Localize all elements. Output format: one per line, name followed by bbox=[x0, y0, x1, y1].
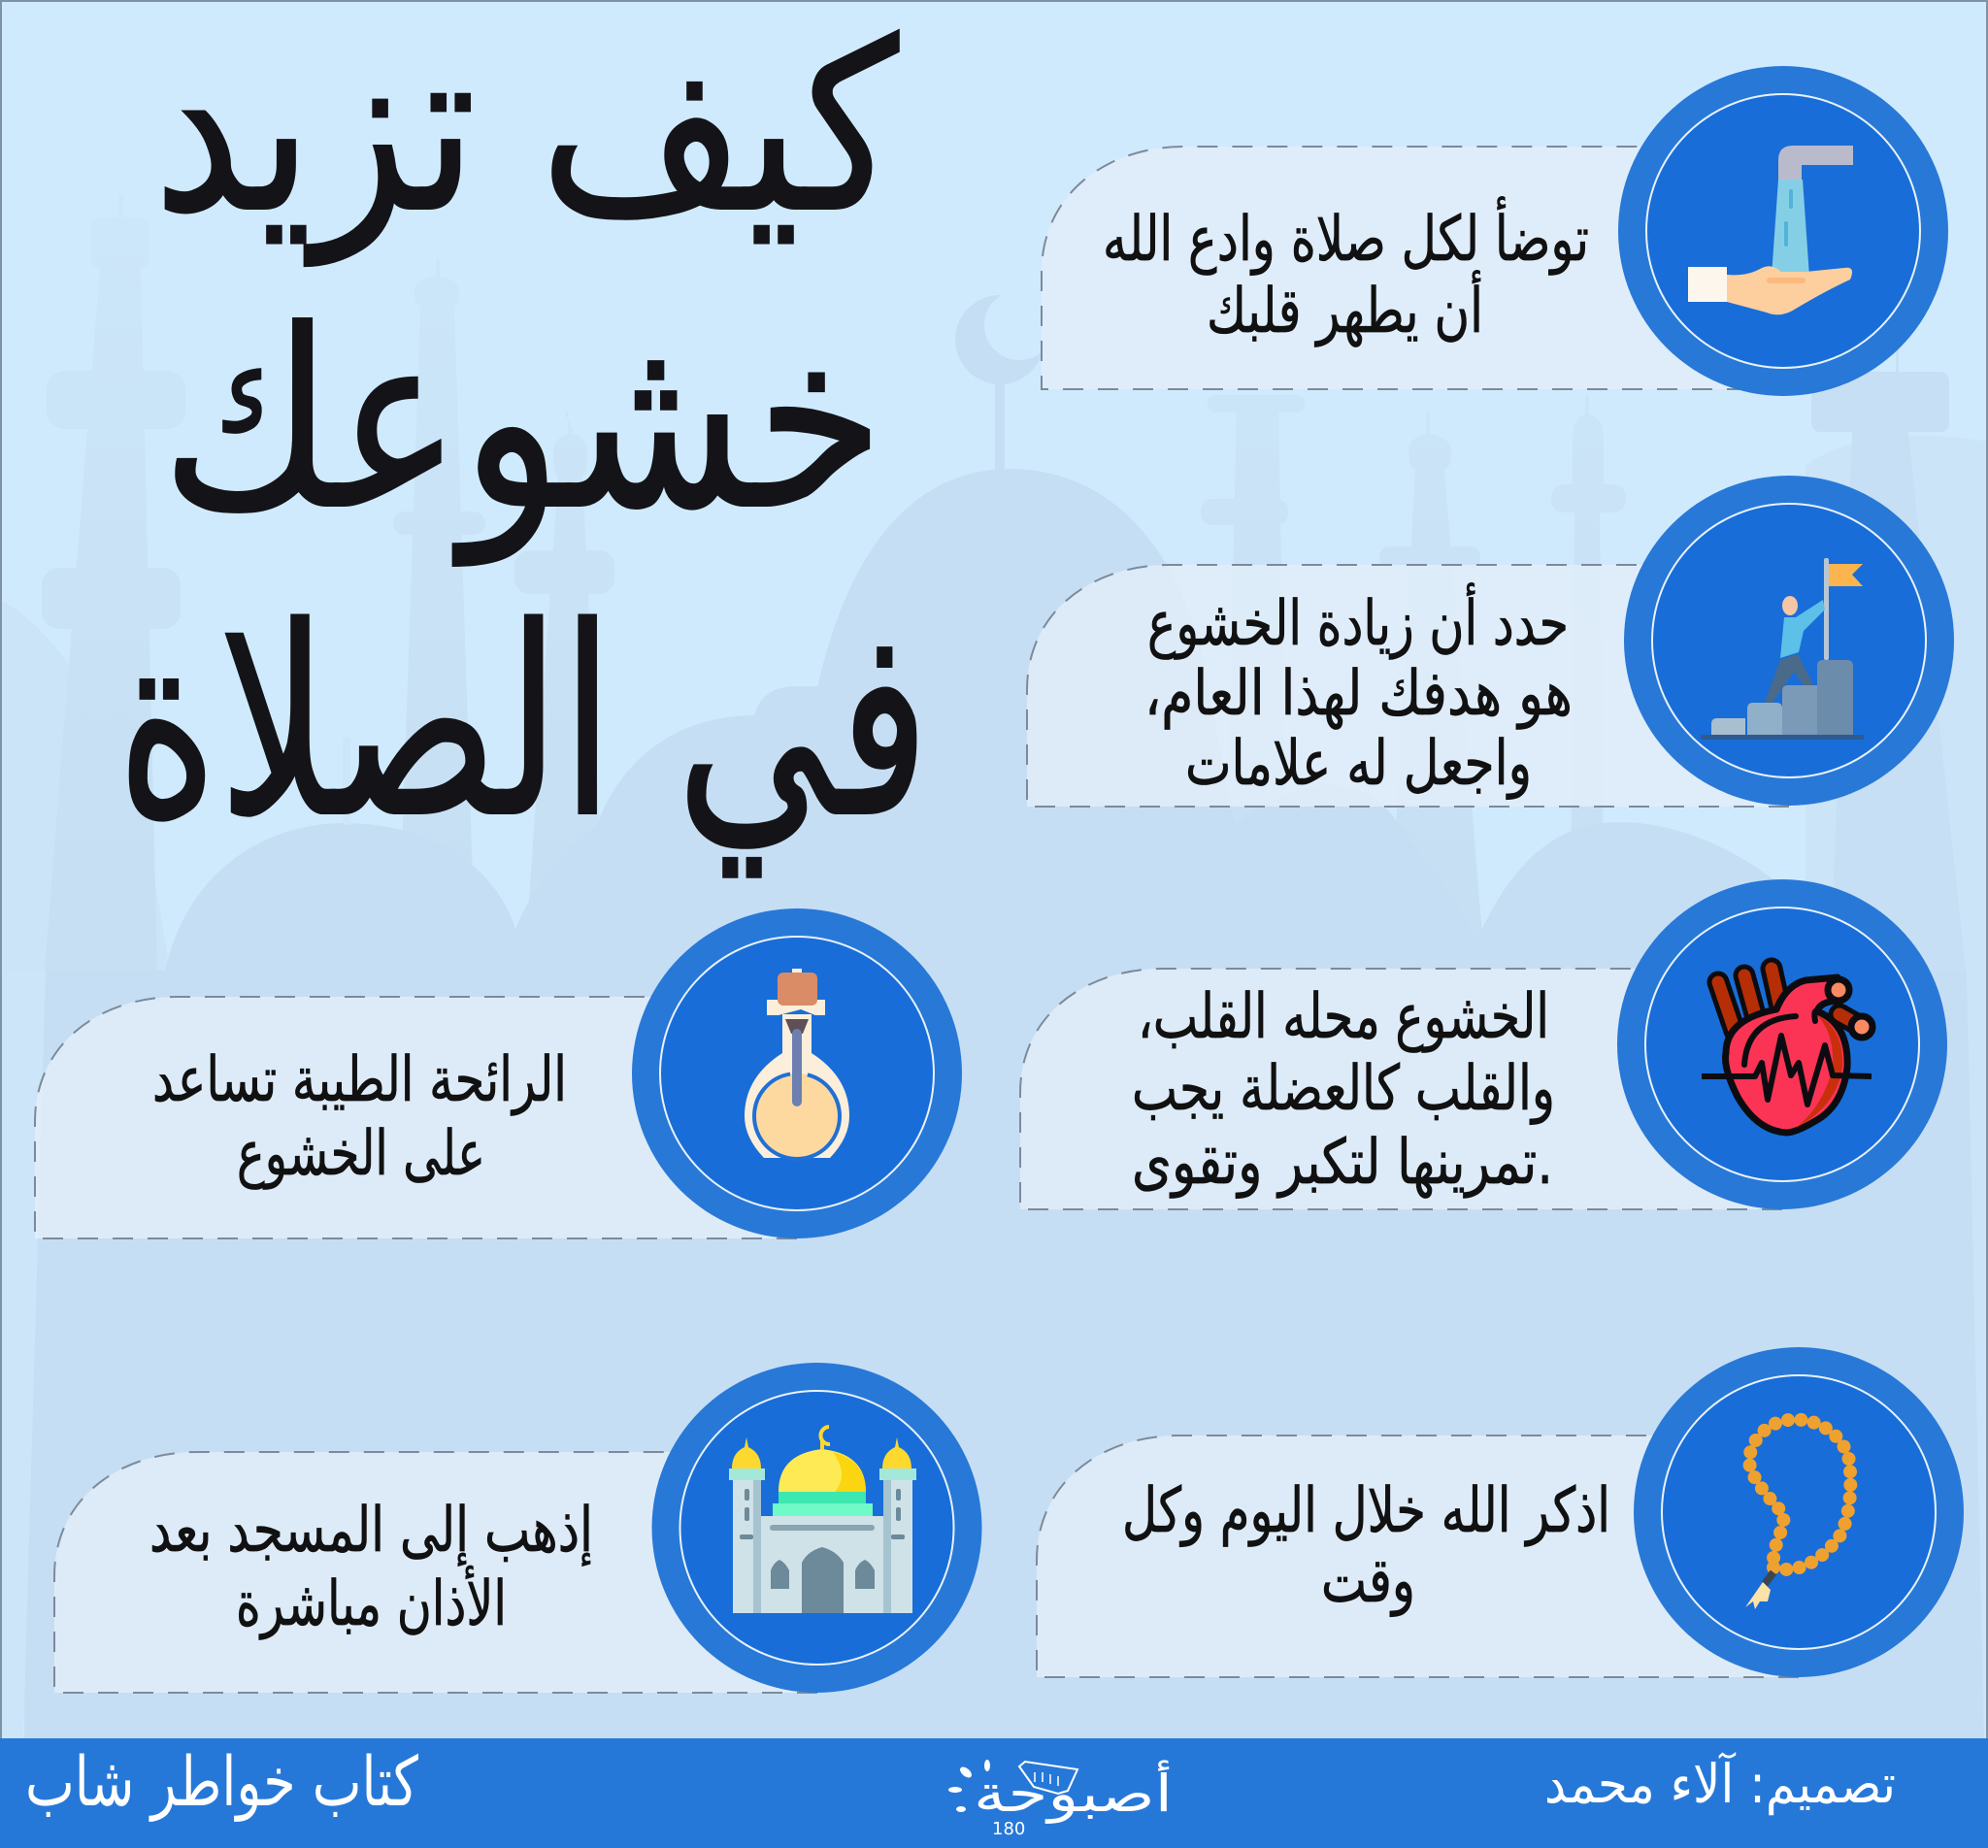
panel: step 1 bbox=[1042, 147, 1782, 389]
title: خشوعك bbox=[161, 277, 884, 566]
text: step 2: هو هدفك لهذا العام، bbox=[1144, 658, 1573, 730]
footer bar bbox=[0, 1738, 1988, 1848]
text: step 2: حدد أن زيادة الخشوع bbox=[1147, 582, 1569, 660]
text: step 1 bbox=[1103, 196, 1589, 347]
text: step 4: وقت bbox=[1321, 1545, 1415, 1617]
icon: faucet and hand bbox=[1618, 66, 1948, 396]
icon: perfume bottle bbox=[632, 908, 962, 1238]
text: step 5 bbox=[152, 1044, 567, 1190]
text: step 5: على الخشوع bbox=[237, 1118, 485, 1190]
title: في الصلاة bbox=[116, 571, 930, 877]
logo: أصبوحة bbox=[974, 1760, 1173, 1824]
text: designer: تصميم: آلاء محمد bbox=[1544, 1752, 1896, 1816]
text: step 5: الرائحة الطيبة تساعد bbox=[152, 1044, 567, 1116]
text: step 1: أن يطهر قلبك bbox=[1207, 270, 1483, 347]
text: step 6 bbox=[149, 1495, 593, 1640]
text: step 4 bbox=[1122, 1475, 1610, 1617]
text: step 6: إذهب إلى المسجد بعد bbox=[149, 1495, 593, 1567]
panel: step 2 bbox=[1027, 565, 1789, 807]
icon: flag on steps bbox=[1624, 476, 1954, 806]
text: step 1: توضأ لكل صلاة وادع الله bbox=[1103, 196, 1589, 276]
text: step 2 bbox=[1144, 582, 1573, 800]
text: step 3: الخشوع محله القلب، bbox=[1138, 981, 1549, 1053]
text: step 6: الأذان مباشرة bbox=[236, 1566, 507, 1640]
text: book name: كتاب خواطر شاب bbox=[25, 1742, 418, 1822]
text: step 3: والقلب كالعضلة يجب bbox=[1132, 1053, 1555, 1125]
text: step 2: واجعل له علامات bbox=[1185, 728, 1532, 800]
panel: step 6 bbox=[54, 1452, 817, 1693]
logo bbox=[948, 1760, 1173, 1839]
panel: step 4 bbox=[1037, 1436, 1799, 1677]
panel: step 5 bbox=[35, 997, 797, 1238]
text: step 3 bbox=[1132, 981, 1555, 1199]
logo: 180 bbox=[992, 1819, 1025, 1839]
panel: step 3 bbox=[1020, 969, 1782, 1209]
icon: prayer beads bbox=[1634, 1347, 1964, 1677]
text: step 4: اذكر الله خلال اليوم وكل bbox=[1122, 1475, 1610, 1547]
icon: heart bbox=[1617, 879, 1947, 1209]
icon: mosque bbox=[652, 1363, 982, 1693]
title bbox=[116, 0, 930, 877]
text: step 3: تمرينها لتكبر وتقوى. bbox=[1132, 1127, 1553, 1199]
